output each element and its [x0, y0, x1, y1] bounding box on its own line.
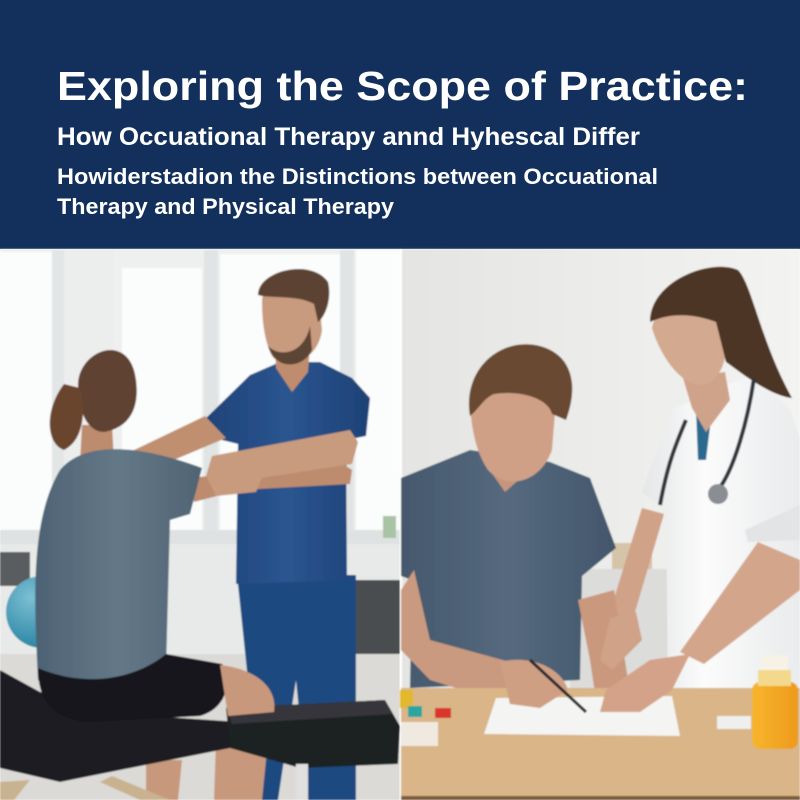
header banner: [0, 0, 800, 249]
wooden desk: [401, 688, 800, 800]
patient: [401, 344, 628, 708]
description: Therapy and Physical Therapy: [57, 194, 395, 219]
patient: [35, 350, 274, 722]
photo: occupational therapy session: [400, 249, 800, 800]
colour blocks: [400, 690, 451, 746]
paper: [484, 696, 680, 736]
title: Exploring the Scope of Practice:: [57, 63, 748, 109]
clinician: [608, 267, 800, 690]
description: Howiderstadion the Distinctions between Occuational: [57, 164, 658, 189]
white eraser: [717, 716, 751, 729]
window frames: [0, 250, 400, 800]
photo: physical therapy session: [0, 249, 400, 800]
treatment table: [0, 670, 400, 800]
subtitle: How Occuational Therapy annd Hyhescal Differ: [57, 123, 640, 151]
stethoscope: [660, 378, 754, 505]
patient lower legs: [146, 740, 268, 800]
patient hand and pen: [500, 660, 586, 712]
clinician hands: [600, 612, 690, 712]
therapist: [130, 269, 370, 800]
description: [57, 164, 658, 219]
exercise ball: [6, 576, 78, 648]
juice bottle: [752, 655, 798, 749]
